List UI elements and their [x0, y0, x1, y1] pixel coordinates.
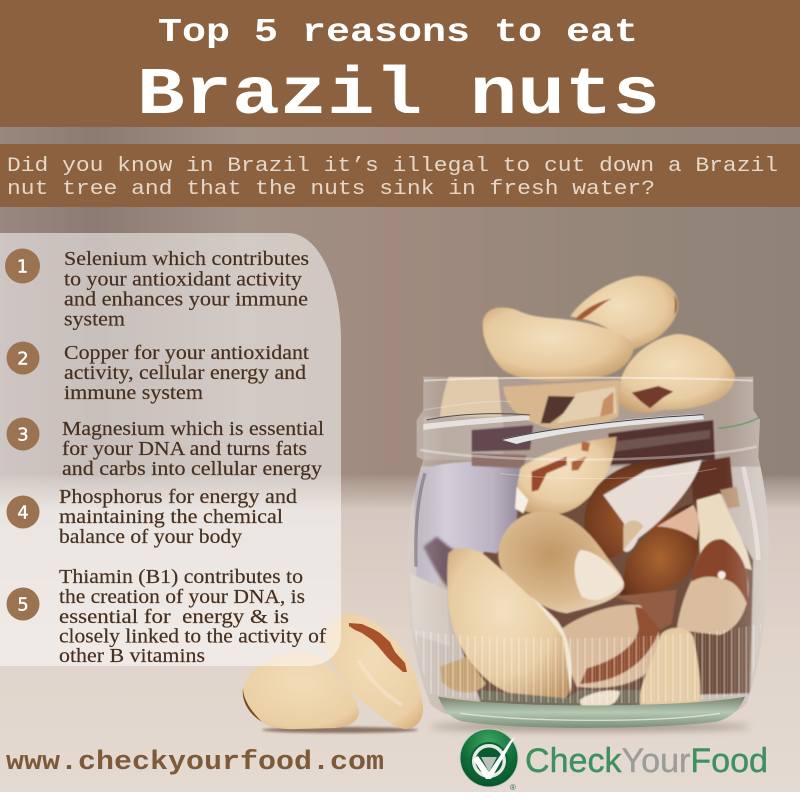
website url: www.checkyourfood.com — [6, 748, 384, 778]
reason 2: immune system — [64, 382, 203, 404]
large pale nut lower left — [447, 548, 571, 701]
registered mark: ® — [510, 783, 516, 792]
reason 3: 3 — [17, 424, 29, 446]
bottom brown nut — [560, 605, 659, 688]
dark gap near base — [480, 690, 640, 707]
fact text: Did you know in Brazil it’s illegal to cut down a Brazil — [7, 155, 778, 178]
jar shadow on table — [430, 723, 750, 731]
reason 2: Copper for your antioxidant — [64, 342, 309, 364]
did-you-know strip — [0, 144, 800, 207]
reason 4: 4 — [17, 502, 29, 524]
reason 2: 2 — [17, 348, 29, 370]
logo wordmark: CheckYourFood — [525, 742, 768, 780]
fact text — [7, 155, 778, 201]
reason 1: to your antioxidant activity — [64, 268, 303, 290]
reason 5: Thiamin (B1) contributes to — [59, 566, 303, 588]
reason 1 — [5, 248, 309, 330]
purple shadow behind collar — [472, 425, 533, 452]
jar contents — [408, 376, 768, 715]
reason 3: Magnesium which is essential — [62, 418, 324, 440]
photo: glass jar filled with Brazil nuts — [400, 276, 773, 731]
nuts above the rim — [483, 276, 735, 413]
reason 1: Selenium which contributes — [64, 248, 309, 270]
small pale nut bottom right — [640, 628, 700, 706]
title line 2: Brazil nuts — [137, 58, 660, 134]
reason 2: activity, cellular energy and — [64, 362, 306, 384]
glass reflections, rim and collar — [407, 377, 769, 727]
dark gaps between nuts — [453, 467, 753, 700]
reason 3 — [6, 418, 324, 480]
reason 1: system — [64, 308, 125, 330]
reason 3: and carbs into cellular energy — [62, 458, 323, 480]
reason 5: closely linked to the activity of — [59, 626, 326, 648]
reason 5: essential for energy & is — [59, 606, 289, 628]
reason 4 — [6, 486, 297, 548]
reason 5 — [6, 566, 326, 667]
right lower nut — [676, 554, 750, 636]
dark nut under collar — [608, 420, 715, 465]
tan centre nut in neck — [503, 380, 620, 429]
jar base — [438, 697, 745, 728]
logo icon: check badge — [460, 729, 518, 787]
left nut behind rim — [440, 346, 502, 417]
title line 1: Top 5 reasons to eat — [158, 14, 638, 51]
header banner — [0, 0, 800, 134]
logo: CheckYourFood — [460, 729, 768, 792]
reason 1: 1 — [17, 256, 28, 278]
reason 4: maintaining the chemical — [59, 506, 283, 528]
reason 2 — [6, 342, 309, 404]
reason 4: balance of your body — [59, 526, 243, 548]
striped diagonal nut — [517, 437, 617, 515]
reason 4: Phosphorus for energy and — [59, 486, 297, 508]
brown kernel — [620, 503, 700, 595]
reason 3: for your DNA and turns fats — [62, 438, 307, 460]
ribbed lower band of the jar — [413, 623, 762, 703]
big tan nut — [498, 511, 624, 613]
reason 1: and enhances your immune — [64, 288, 308, 310]
reason 5: 5 — [17, 594, 29, 616]
dark maroon right — [690, 457, 733, 503]
panel: five reasons — [0, 233, 341, 667]
dark nut with white reflection — [584, 460, 702, 559]
fact text: nut tree and that the nuts sink in fresh water? — [7, 178, 655, 201]
lavender reflection on the left — [413, 461, 520, 587]
photo: two loose Brazil nuts on the table — [243, 613, 423, 733]
reason 5: other B vitamins — [59, 645, 205, 667]
reason 5: the creation of your DNA, is — [59, 586, 305, 608]
